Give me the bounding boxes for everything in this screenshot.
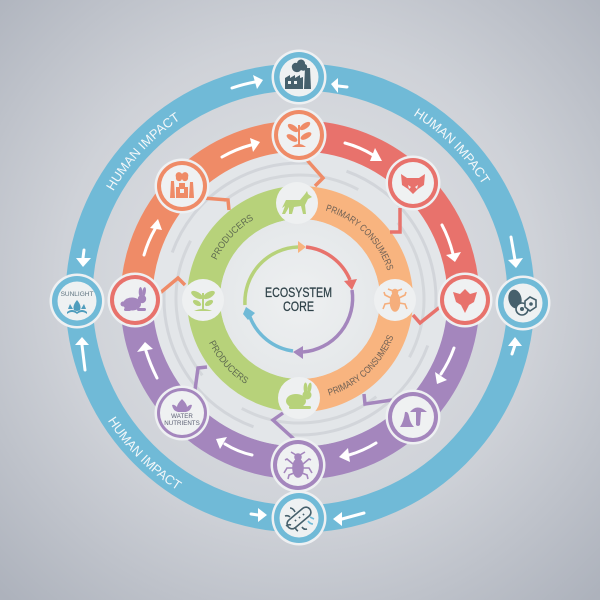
node: rabbit (inner bottom) [278, 377, 320, 419]
label: primary consumers bottom: PRIMARY CONSUMERS [328, 335, 393, 396]
node: sunlight (left outer) [50, 274, 104, 328]
label: sunlight: SUNLIGHT [61, 291, 93, 298]
icon: seeds [507, 288, 536, 315]
node: wolf (inner top) [276, 182, 318, 224]
label: producers bottom: PRODUCERS [209, 340, 248, 384]
label: human impact bottom left: HUMAN IMPACT [108, 416, 182, 488]
node: plant (inner left) [182, 279, 224, 321]
node: factory (top outer) [272, 50, 326, 104]
band: grey track between rings [126, 125, 474, 473]
icon: wolf [282, 191, 312, 214]
label: water nutrients: WATER [171, 413, 193, 420]
icon: factory [285, 59, 311, 89]
label: human impact top left: HUMAN IMPACT [106, 112, 178, 190]
node: fox (top right middle) [386, 156, 440, 210]
node: insect (bottom middle) [270, 438, 326, 492]
icon: fox head [453, 289, 477, 313]
arrows: middle ring [137, 138, 461, 462]
title: ecosystem core: ECOSYSTEM [265, 284, 332, 300]
connectors [160, 160, 440, 440]
icon: bug [383, 289, 407, 311]
node: seeds (right outer) [496, 276, 550, 330]
icon: refinery [170, 172, 194, 198]
label: human impact top right: HUMAN IMPACT [414, 108, 490, 182]
center cycle arrows [243, 241, 357, 359]
center disc [220, 219, 380, 379]
title: ecosystem core: CORE [283, 298, 314, 314]
label: water nutrients: NUTRIENTS [164, 420, 200, 427]
ring: inner producers and consumers [188, 186, 412, 411]
node: industry (upper left middle) [154, 158, 210, 214]
arrows: outer ring [75, 75, 523, 526]
icon: mushrooms [400, 408, 427, 427]
icon: bacterium [285, 505, 314, 531]
icon: sprout [285, 120, 313, 147]
node: rabbit (left middle) [108, 272, 162, 328]
node: bug (inner right) [374, 279, 416, 321]
ring: middle food chain [137, 137, 463, 463]
node: fox (right middle) [438, 272, 492, 328]
node: mushrooms (lower right middle) [386, 390, 440, 444]
title: ecosystem core [265, 284, 332, 314]
icon: water drop [67, 300, 87, 314]
icon: lotus [172, 399, 192, 412]
ring: outer human impact [66, 64, 534, 532]
icon: sprout [190, 289, 216, 311]
node: bacteria (bottom outer) [272, 490, 326, 546]
icon: fox head [401, 174, 425, 194]
node: water nutrients (lower left middle) [154, 386, 210, 440]
icon: rabbit [286, 382, 312, 409]
icon: insect [284, 452, 312, 479]
icon: rabbit [120, 287, 147, 311]
label: primary consumers top: PRIMARY CONSUMERS [326, 204, 394, 270]
label: producers top: PRODUCERS [211, 214, 253, 260]
node: plant (top middle) [272, 108, 326, 162]
